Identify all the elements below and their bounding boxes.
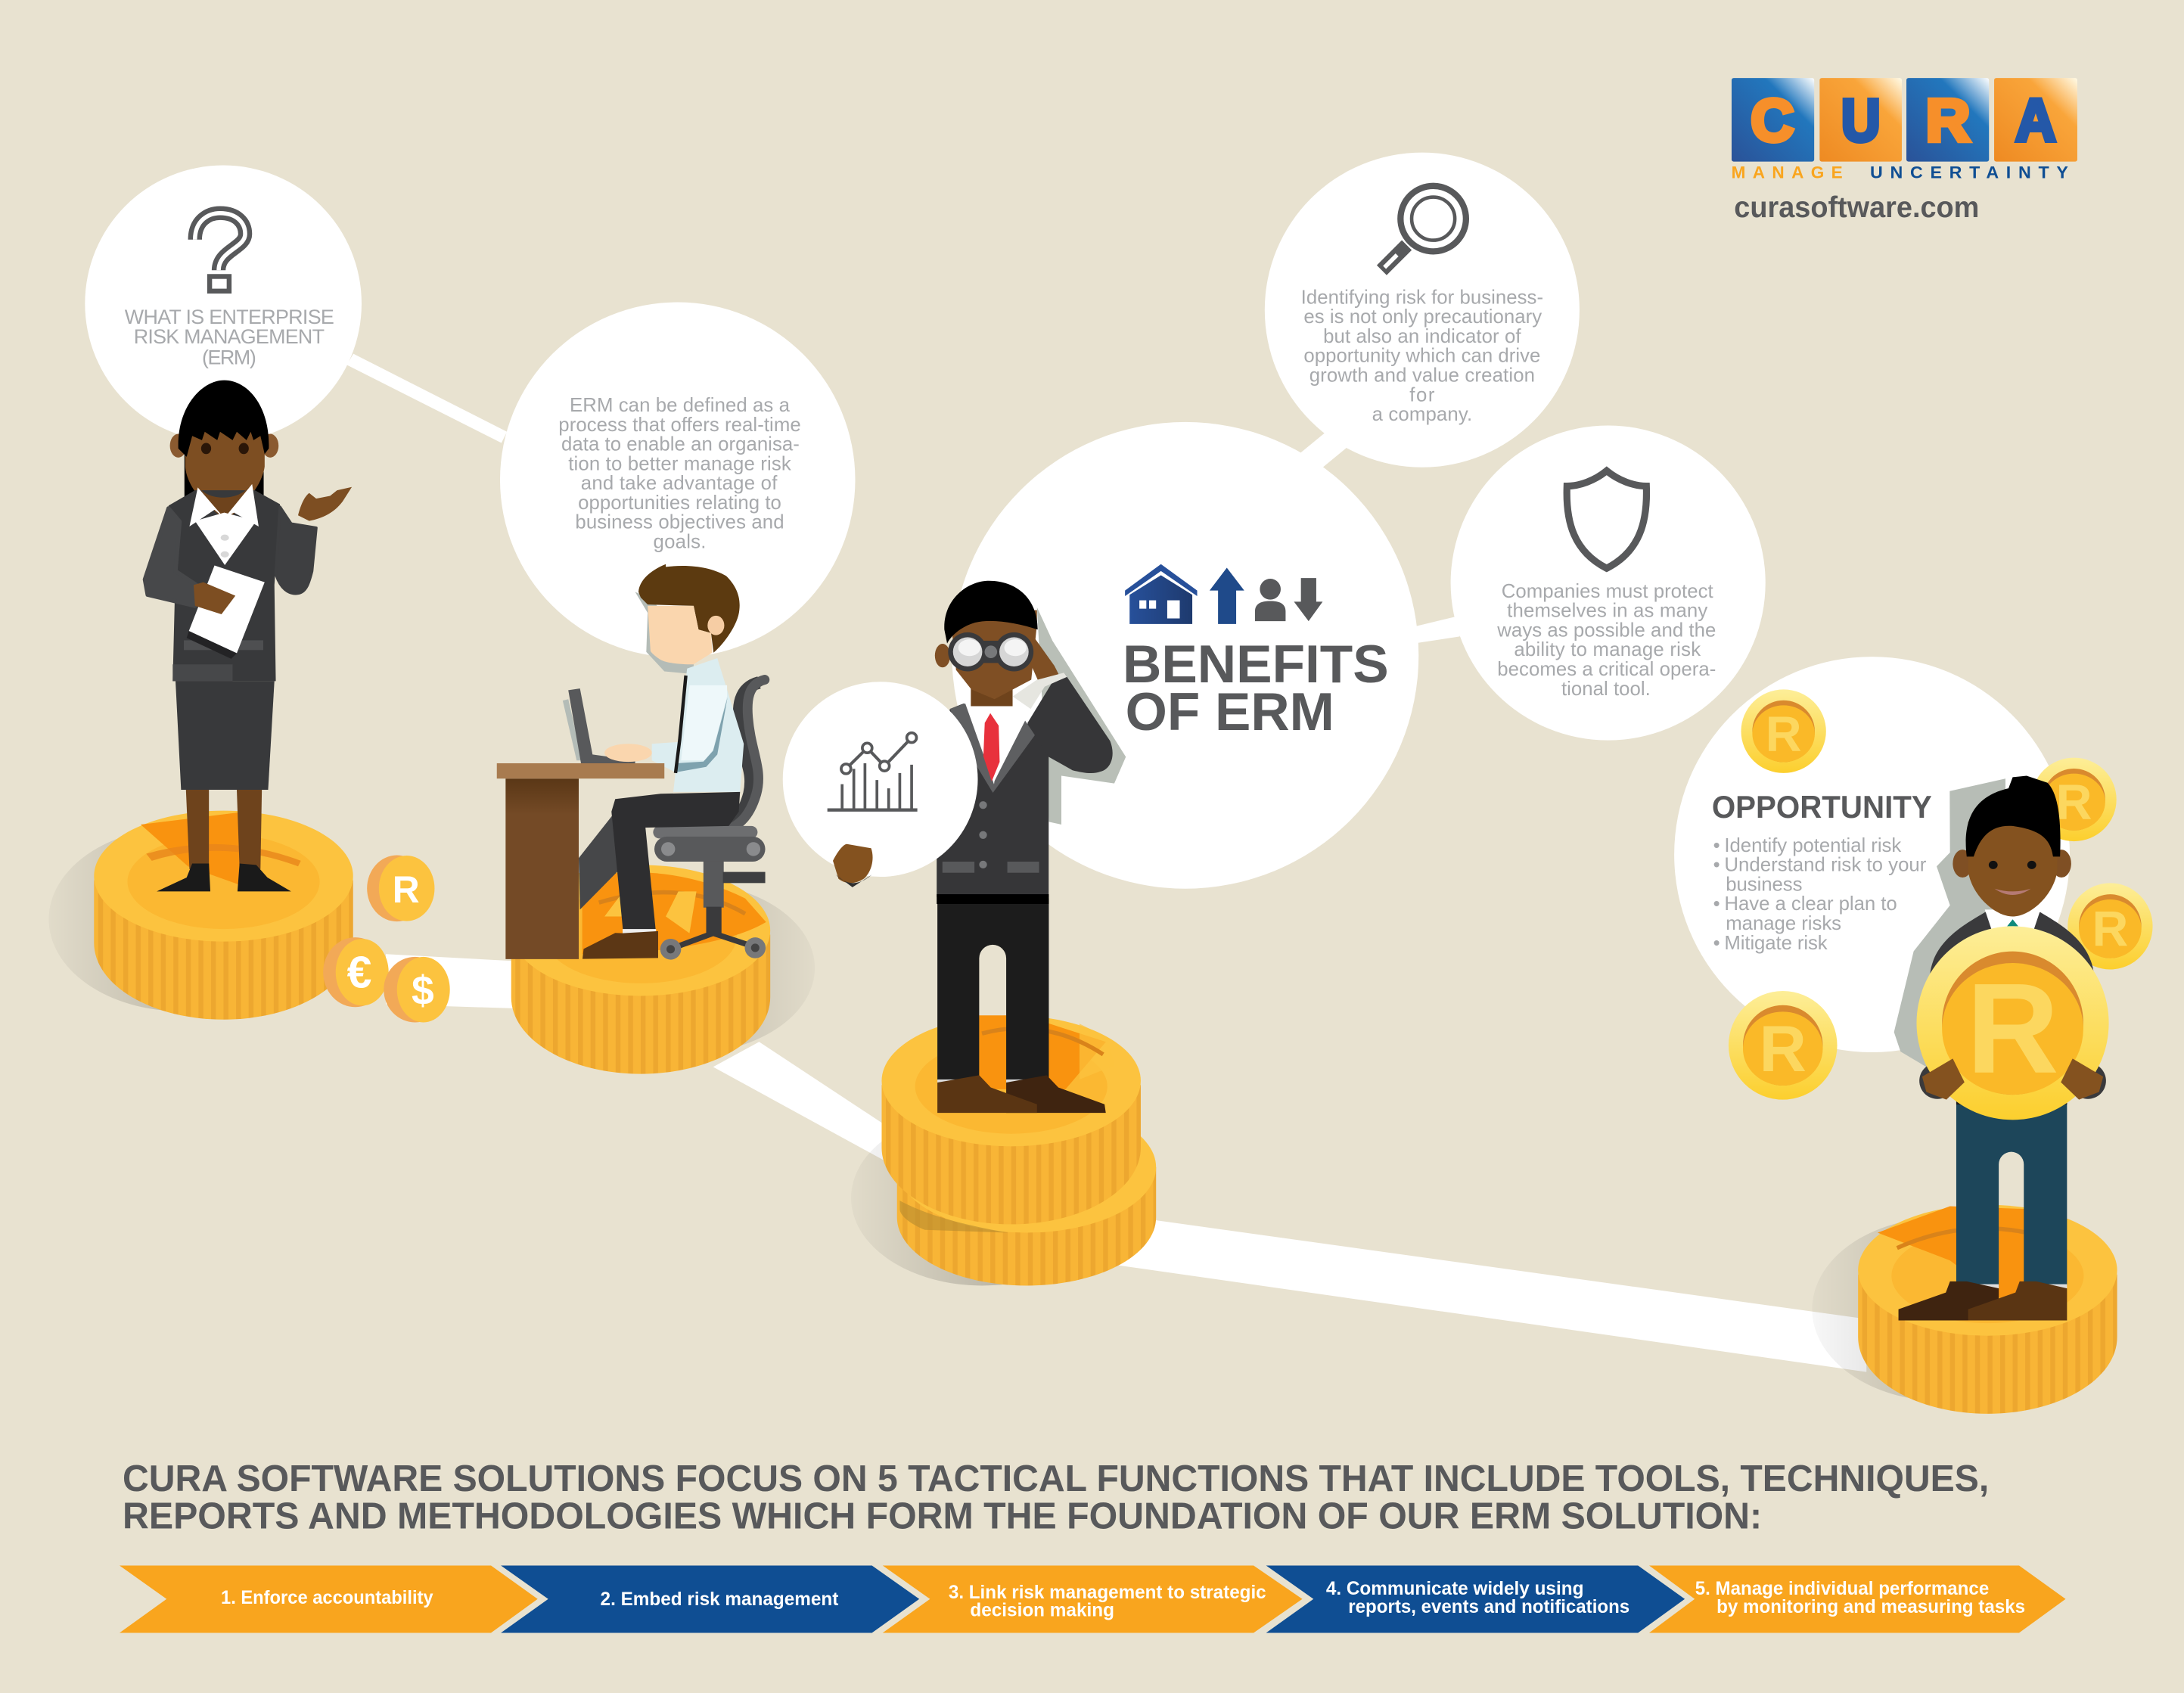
tagline: MANAGE [1732, 163, 1850, 182]
buttons [979, 801, 987, 868]
waist [1956, 1093, 2067, 1104]
shoes [1899, 1281, 1999, 1320]
chevron 5: by monitoring and measuring tasks [1716, 1596, 2025, 1617]
pointing hand [194, 582, 235, 614]
sleeve ends [1919, 1063, 2106, 1099]
big coin: R [1966, 957, 2059, 1100]
coin 2 with shadow [511, 865, 815, 1074]
chevron 4: 4. Communicate widely using [1326, 1578, 1583, 1599]
text: what is ERM question: (ERM) [202, 346, 256, 368]
icon: house [1125, 564, 1198, 624]
hair [638, 564, 740, 653]
panel: chart circle [783, 682, 978, 877]
pocket [184, 640, 263, 650]
coin: rand: R [393, 868, 420, 911]
chevron 4 [1266, 1566, 1685, 1632]
skirt [176, 681, 275, 790]
figure: man's hand over chart circle [833, 844, 873, 887]
chevron 3: decision making [970, 1600, 1114, 1621]
icon: line and bar chart [828, 733, 918, 810]
text: ERM definition: business objectives and [575, 512, 784, 533]
logo squares [1732, 78, 2077, 162]
text: ERM definition: data to enable an organisa- [561, 434, 800, 455]
text: identifying risk: Identifying risk for business- [1301, 287, 1543, 308]
sleeves [144, 508, 197, 606]
chevron process [120, 1566, 2065, 1632]
text: protection: tional tool. [1561, 679, 1651, 700]
hand [604, 744, 652, 762]
ears [170, 434, 278, 458]
panel: opportunity circle [1674, 657, 2070, 1052]
chevron 4: reports, events and notifications [1348, 1596, 1629, 1617]
arm [1027, 673, 1113, 773]
website: curasoftware.com [1734, 191, 1979, 224]
tagline [1732, 163, 2076, 182]
text: protection: becomes a critical opera- [1497, 659, 1716, 680]
cuff [623, 929, 656, 934]
sleeve shadow [676, 697, 728, 772]
chevron 2: 2. Embed risk management [601, 1589, 839, 1610]
icon: up arrow [1210, 567, 1244, 624]
eyes [1989, 861, 2036, 869]
shoes [157, 864, 291, 891]
coin: euro: € [347, 948, 371, 997]
shoes [1006, 1075, 1106, 1113]
collar [189, 484, 259, 527]
lapels [950, 704, 1035, 793]
list: opportunity bullets: Have a clear plan to [1724, 893, 1897, 915]
list: opportunity bullets: manage risks [1726, 913, 1841, 934]
text: what is ERM question: WHAT IS ENTERPRISE [125, 306, 334, 328]
floating R coins [1729, 689, 2153, 1100]
hair [944, 581, 1038, 644]
text: identifying risk: but also an indicator of [1323, 326, 1521, 347]
logo letters: U [1841, 86, 1881, 154]
coin: right [2067, 883, 2153, 969]
figure: man holding big coin [1894, 776, 2109, 1320]
face [1968, 822, 2057, 917]
chevron 1 [120, 1566, 538, 1632]
pockets [943, 862, 1039, 873]
eyes [201, 443, 249, 454]
hair back [185, 432, 264, 499]
face [648, 606, 713, 664]
text: ERM definition: process that offers real-time [558, 415, 801, 436]
list: opportunity bullets: Understand risk to your [1724, 855, 1927, 876]
coin 3 upper [881, 1015, 1141, 1224]
trousers [1956, 1101, 2067, 1285]
list: opportunity bullets: • [1713, 933, 1720, 954]
back leg [579, 815, 623, 909]
panel: what is ERM circle [85, 166, 362, 442]
logo letters: R [1925, 86, 1970, 154]
panel: ERM definition circle [500, 303, 855, 657]
shirt [195, 513, 256, 565]
logo letters: C [1751, 86, 1794, 154]
text: identifying risk: a company. [1372, 404, 1472, 425]
coin: dollar: $ [412, 969, 434, 1014]
text: protection: themselves in as many [1507, 601, 1707, 622]
heading: tactical functions statement: REPORTS AND METHODOLOGIES WHICH FORM THE FOUNDATION OF OUR ERM SOLUTION: [123, 1496, 1762, 1537]
coin: right: R [2092, 901, 2128, 957]
list: opportunity bullets: • [1713, 835, 1720, 856]
chevron 5: 5. Manage individual performance [1695, 1578, 1989, 1599]
list: opportunity bullets: Identify potential risk [1724, 835, 1901, 856]
face [185, 425, 265, 513]
text: protection: Companies must protect [1502, 581, 1713, 602]
heading: opportunity: OPPORTUNITY [1712, 790, 1932, 825]
neck [199, 485, 250, 520]
desk [497, 763, 664, 959]
text: protection: ways as possible and the [1496, 620, 1716, 641]
logo letters [1751, 86, 2056, 154]
list: opportunity bullets: business [1726, 874, 1803, 895]
hair [1966, 776, 2061, 856]
coin 4 with shadow [1812, 1205, 2117, 1414]
logo: Cura [1732, 78, 2077, 224]
figure: businesswoman with document [144, 381, 352, 891]
text: ERM definition: tion to better manage risk [568, 453, 791, 474]
text: protection: ability to manage risk [1514, 639, 1701, 660]
text: identifying risk: for [1409, 384, 1435, 405]
neck and ear [935, 644, 950, 667]
text: ERM definition: ERM can be defined as a [570, 395, 791, 416]
chevron 3 [883, 1566, 1303, 1632]
coin: top left: R [1766, 706, 1802, 762]
text: identifying risk: growth and value creation [1309, 365, 1535, 386]
legs [186, 790, 262, 869]
trousers [611, 792, 740, 930]
coin: dollar [384, 957, 450, 1022]
logo letters: A [2015, 86, 2056, 154]
shoe [583, 931, 658, 959]
chevron 2 [501, 1566, 919, 1632]
document [189, 566, 265, 654]
panel: benefits circle [952, 422, 1418, 889]
hair fringe [179, 381, 269, 457]
cuffs [1956, 1285, 2067, 1288]
panel: identifying risk circle [1265, 153, 1580, 468]
text: what is ERM question: RISK MANAGEMENT [134, 325, 325, 348]
coin: behind head: R [2056, 775, 2092, 831]
jacket [169, 490, 280, 681]
tagline: UNCERTAINTY [1870, 163, 2076, 182]
cuff and hand [1013, 673, 1067, 709]
jacket [1930, 912, 2094, 1058]
heading: benefits of ERM: BENEFITS [1123, 635, 1389, 694]
heading: tactical functions statement: CURA SOFTWARE SOLUTIONS FOCUS ON 5 TACTICAL FUNCTIONS THAT INCLUDE TOOLS, TECHNIQUES, [123, 1458, 1989, 1499]
chevron 3: 3. Link risk management to strategic [949, 1582, 1266, 1603]
text: ERM definition: and take advantage of [581, 473, 778, 494]
icon: question mark [195, 213, 245, 291]
panel: protection circle [1451, 425, 1766, 741]
trousers [937, 899, 1049, 1080]
coin: rand [367, 856, 434, 921]
heading: benefits of ERM: OF ERM [1126, 682, 1334, 742]
text: identifying risk: opportunity which can drive [1303, 346, 1540, 367]
figure: man working at desk [497, 564, 766, 960]
binoculars [948, 632, 1033, 671]
connecting path bands [346, 354, 1866, 1372]
shirt and lapels [1985, 909, 2040, 930]
jacket [937, 704, 1049, 897]
shadow [1894, 778, 2005, 1067]
tie [983, 713, 999, 781]
coin 3 lower and shadow [851, 1101, 1156, 1285]
text: ERM definition: goals. [654, 532, 706, 553]
hands [1922, 1058, 2103, 1100]
ear [707, 616, 724, 635]
icon: down arrow [1294, 578, 1322, 621]
tie [676, 676, 686, 773]
shirt [966, 701, 1017, 787]
chevron 1: 1. Enforce accountability [221, 1587, 433, 1608]
chevron 5 [1649, 1566, 2065, 1632]
coin 1 with shadow [48, 811, 353, 1020]
shirt [652, 658, 744, 792]
list: opportunity bullets: • [1713, 893, 1720, 915]
ears [1953, 850, 2071, 878]
text: identifying risk: es is not only precautionary [1303, 306, 1542, 328]
big coin [1916, 926, 2109, 1120]
coin: lower left: R [1759, 1013, 1807, 1086]
chair [653, 680, 766, 960]
text: ERM definition: opportunities relating to [578, 492, 781, 514]
coin: top left [1741, 689, 1826, 773]
small currency coins [323, 856, 450, 1022]
head shadow [635, 592, 694, 674]
icon: magnifying glass [1381, 186, 1466, 270]
list: opportunity bullets: • [1713, 855, 1720, 876]
laptop [563, 699, 583, 760]
coin: lower left [1729, 991, 1838, 1100]
figure: man with binoculars [935, 581, 1126, 1113]
mouth [1995, 889, 2030, 895]
face [950, 610, 1037, 699]
hand raised [298, 487, 352, 521]
icon: person [1255, 579, 1285, 621]
coin: behind head [2031, 758, 2117, 841]
cuffs [937, 1079, 1049, 1083]
shadow [1037, 607, 1126, 825]
icon: shield [1567, 471, 1646, 568]
coin: euro [323, 937, 389, 1007]
list: opportunity bullets: Mitigate risk [1724, 933, 1828, 954]
